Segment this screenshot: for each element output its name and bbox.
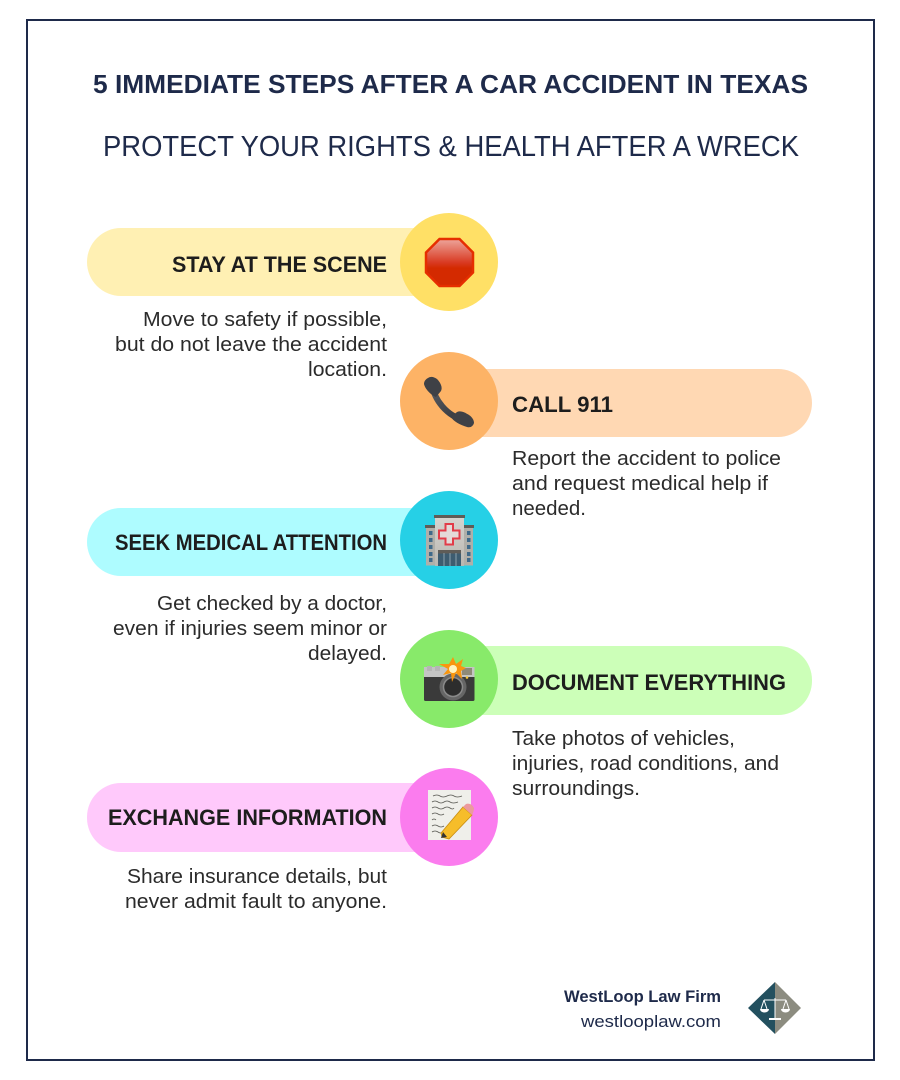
footer: firm name and website: westlooplaw.com xyxy=(580,1012,721,1031)
icon: camera with flash xyxy=(424,657,474,701)
step 5 description: Share insurance details, but xyxy=(127,866,387,888)
footer: firm name and website xyxy=(564,987,721,1031)
step 2 description: and request medical help if xyxy=(512,473,768,495)
step 4 description: surroundings. xyxy=(512,778,640,800)
step 5: exchange information xyxy=(87,768,498,913)
step 2 heading: CALL 911 xyxy=(512,392,613,417)
subtitle: PROTECT YOUR RIGHTS & HEALTH AFTER A WRECK xyxy=(103,131,800,163)
icon: law firm logo with scales xyxy=(748,982,801,1034)
icon: memo and pencil xyxy=(428,790,474,840)
step 3 description: Get checked by a doctor, xyxy=(157,593,387,615)
step 5 description: never admit fault to anyone. xyxy=(125,891,387,913)
title: 5 IMMEDIATE STEPS AFTER A CAR ACCIDENT IN TEXAS xyxy=(93,69,808,99)
step 4 description: injuries, road conditions, and xyxy=(512,753,779,775)
step 1 description: but do not leave the accident xyxy=(115,334,387,356)
step 4 heading: DOCUMENT EVERYTHING xyxy=(512,670,786,695)
step 1 description xyxy=(115,309,387,381)
footer: firm name and website: WestLoop Law Firm xyxy=(564,987,721,1006)
step 2 description: needed. xyxy=(512,498,586,520)
step 2 description xyxy=(512,448,781,520)
step 5 description xyxy=(125,866,387,913)
step 3 description: delayed. xyxy=(308,643,387,665)
icon: hospital xyxy=(425,515,474,566)
icon: telephone receiver xyxy=(424,377,474,427)
step 3 description: even if injuries seem minor or xyxy=(113,618,387,640)
step 4: document everything xyxy=(400,630,812,800)
step 3 heading: SEEK MEDICAL ATTENTION xyxy=(115,530,387,555)
icon: stop sign xyxy=(426,239,473,286)
step 3: seek medical attention xyxy=(87,491,498,665)
step 2 description: Report the accident to police xyxy=(512,448,781,470)
step 1 description: Move to safety if possible, xyxy=(143,309,387,331)
step 2: call 911 xyxy=(400,352,812,520)
step 4 description xyxy=(512,728,779,800)
step 1 heading: STAY AT THE SCENE xyxy=(172,252,387,277)
step 5 heading: EXCHANGE INFORMATION xyxy=(108,805,387,830)
step 1 description: location. xyxy=(308,359,387,381)
step 1: stay at the scene xyxy=(87,213,498,381)
step 4 description: Take photos of vehicles, xyxy=(512,728,735,750)
step 3 description xyxy=(113,593,387,665)
